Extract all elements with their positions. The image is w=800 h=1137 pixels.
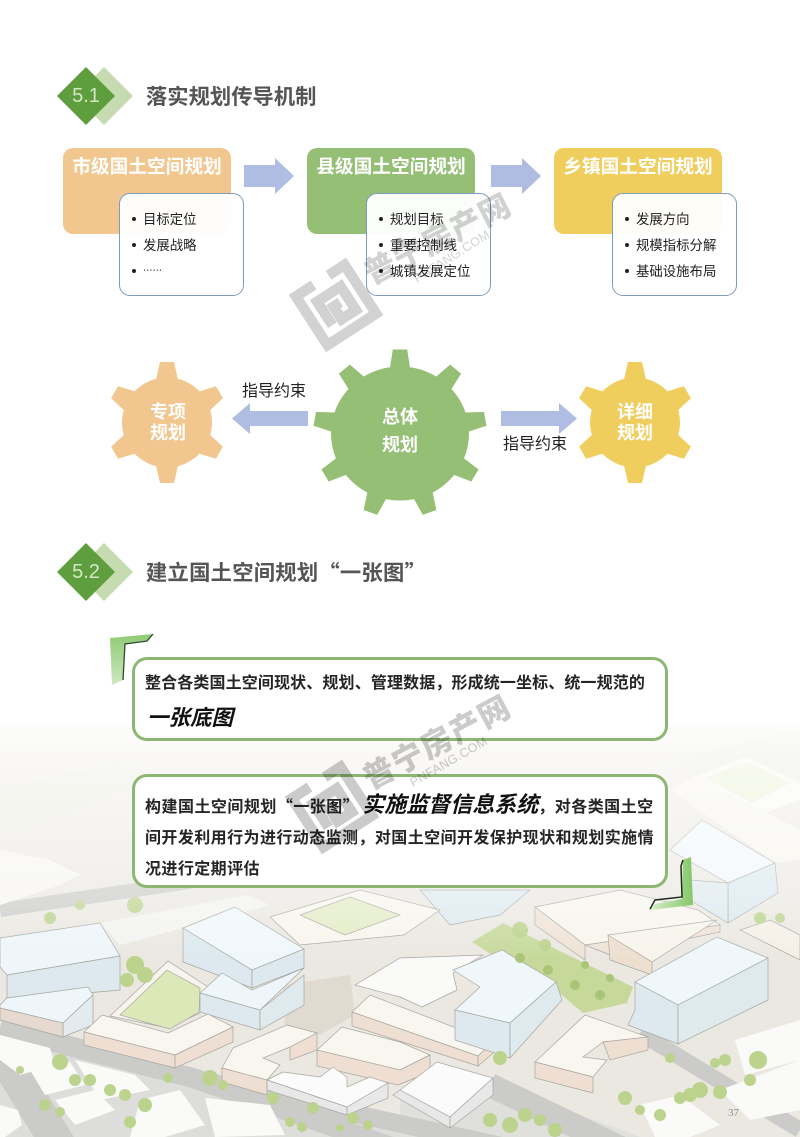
gear label: 专项规划: 规划 xyxy=(150,419,186,445)
panel: 县级国土空间规划: 县级国土空间规划 xyxy=(316,152,466,179)
callout emphasis: 一张底图: 一张底图 xyxy=(147,701,233,732)
arrow label: right: 指导约束 xyxy=(503,430,567,454)
panel: 市级国土空间规划 xyxy=(63,148,231,234)
gear label: 专项规划: 专项 xyxy=(150,398,186,424)
gear label: 详细规划: 详细 xyxy=(617,398,653,424)
panel: 市级国土空间规划: 市级国土空间规划 xyxy=(72,152,222,179)
gear: 详细规划 xyxy=(577,362,693,483)
arrow: left xyxy=(232,403,308,434)
callout text line 3: 况进行定期评估 xyxy=(145,855,260,879)
arrow label: left: 指导约束 xyxy=(242,377,306,401)
faint upper district xyxy=(0,850,80,905)
watermark: upper: PNFANG.COM xyxy=(411,228,492,286)
heading: 落实规划传导机制: 落实规划传导机制 xyxy=(146,80,316,111)
arrow: right xyxy=(501,403,577,434)
gear label: 详细规划: 规划 xyxy=(617,419,653,445)
list: city plan items: 发展战略 xyxy=(143,234,197,254)
buildings xyxy=(0,820,800,1128)
bracket: top-left xyxy=(110,634,153,685)
section number 5.1: 5.1 xyxy=(72,85,100,107)
central park xyxy=(472,923,633,1013)
callout text line 2: 间开发利用行为进行动态监测，对国土空间开发保护现状和规划实施情 xyxy=(145,824,654,848)
gear label: 详细规划 xyxy=(617,398,653,445)
page number: 37 xyxy=(728,1107,739,1119)
list: township plan items: 发展方向 xyxy=(636,208,690,228)
list: city plan items xyxy=(119,193,244,296)
callout: 一张底图 xyxy=(132,657,668,741)
gear label: 总体规划 xyxy=(382,403,418,457)
list: city plan items: …… xyxy=(143,263,162,277)
bracket: bottom-right xyxy=(650,857,693,910)
watermark: upper: 普宁房产网 xyxy=(355,180,518,293)
gear label: 总体规划: 总体 xyxy=(382,403,418,429)
list: county plan items: 规划目标 xyxy=(390,208,444,228)
panel: 乡镇国土空间规划 xyxy=(554,148,722,234)
callout: 实施监督信息系统 xyxy=(132,774,668,888)
list: city plan items: 目标定位 xyxy=(143,208,197,228)
gear label: 专项规划 xyxy=(150,398,186,445)
watermark: lower: PNFANG.COM xyxy=(408,734,490,790)
list: county plan items: 重要控制线 xyxy=(390,234,457,254)
list: county plan items xyxy=(366,193,491,296)
panel: 县级国土空间规划 xyxy=(307,148,475,234)
list: county plan items: 城镇发展定位 xyxy=(390,260,470,280)
gear label: 总体规划: 规划 xyxy=(382,431,418,457)
watermark: lower: 普宁房产网 xyxy=(354,682,518,798)
list: township plan items: 规模指标分解 xyxy=(636,234,716,254)
list: township plan items: 基础设施布局 xyxy=(636,260,716,280)
panel: 乡镇国土空间规划: 乡镇国土空间规划 xyxy=(563,152,713,179)
callout text line 1: 整合各类国土空间现状、规划、管理数据，形成统一坐标、统一规范的 xyxy=(145,669,645,693)
list: township plan items xyxy=(612,193,737,296)
trees xyxy=(16,897,785,1137)
gear: 总体规划 xyxy=(313,350,487,516)
gear: 专项规划 xyxy=(109,362,225,483)
section number 5.2: 5.2 xyxy=(72,561,100,583)
heading: 建立国土空间规划“一张图”: 建立国土空间规划“一张图” xyxy=(146,556,426,587)
callout text line 1 with emphasis: 构建国土空间规划“一张图”实施监督信息系统，对各类国土空 xyxy=(145,787,654,819)
